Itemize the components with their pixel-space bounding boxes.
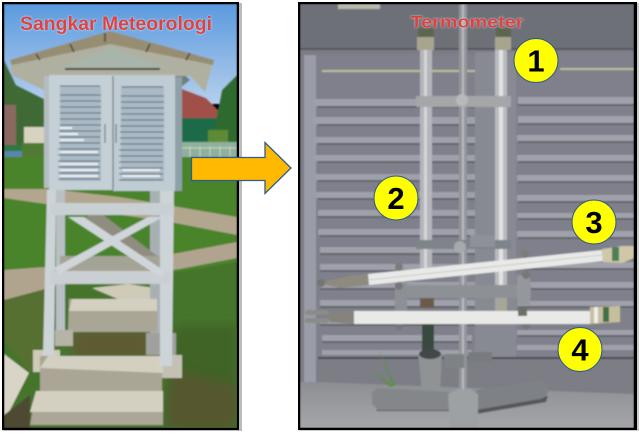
stand post and base	[372, 324, 548, 414]
concrete steps	[30, 299, 182, 425]
right shutter	[516, 52, 634, 357]
thermometer 3	[317, 246, 634, 288]
sill and floor	[300, 357, 634, 428]
thermometer 4	[305, 306, 620, 324]
panel: termometer photo	[298, 2, 639, 431]
badge 4: 4	[571, 332, 589, 368]
title: sangkar meteorologi: Sangkar Meteorologi	[20, 13, 212, 35]
badge 4	[558, 328, 602, 372]
back legs and braces	[56, 190, 160, 333]
roof	[10, 31, 214, 92]
left shutter	[304, 55, 480, 385]
stand	[43, 190, 174, 366]
panel: sangkar meteorologi photo	[2, 2, 242, 431]
vertical thermometers and rod	[416, 4, 511, 389]
badge 1: 1	[527, 44, 545, 78]
central shutter frame	[475, 52, 520, 357]
background trees and building	[4, 60, 237, 166]
grass blade	[373, 354, 396, 388]
bracket	[395, 271, 531, 330]
ground	[4, 157, 237, 428]
badge 2: 2	[387, 181, 405, 216]
louvred cabinet	[44, 75, 182, 191]
badge 1	[514, 38, 558, 82]
title: termometer: Termometer	[410, 14, 524, 32]
badge 3	[572, 200, 616, 244]
arrow: from shelter to thermometers	[192, 142, 291, 194]
badge 3: 3	[585, 205, 603, 240]
badge 2	[374, 176, 418, 220]
